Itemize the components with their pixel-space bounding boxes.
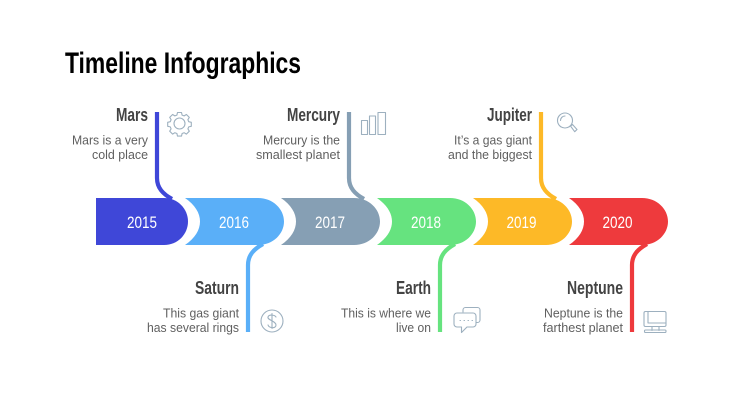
label: Mercury: Mercury is the [263,132,340,148]
label: Mars: cold place [92,147,148,162]
label: Mars: Mars is a very [72,132,148,148]
segment 2016 [185,198,284,332]
icon: bar chart [362,112,386,134]
segment 2017 [281,112,380,245]
icon: magnifier [558,113,577,132]
label: Neptune: Neptune [567,278,623,298]
label: Saturn [147,278,239,335]
icon: chat bubbles [454,308,480,332]
icon: monitor [644,312,666,332]
label: Mars [72,105,148,162]
segment 2015: 2015 [127,213,157,232]
label: Earth: Earth [396,278,431,298]
segment 2015 [96,112,188,245]
label: Earth: This is where we [341,306,431,320]
segment 2020 [569,198,668,332]
label: Neptune [543,278,623,335]
segment 2018 [377,198,476,332]
icon: gear [168,112,191,136]
segment 2020: 2020 [602,213,632,232]
label: Mars: Mars [116,105,148,125]
label: Saturn: Saturn [195,278,239,298]
segment 2017: 2017 [315,213,345,232]
label: Jupiter: Jupiter [487,105,532,125]
label: Earth: live on [396,320,431,335]
label: Saturn: This gas giant [163,306,239,320]
label: Earth [341,278,431,335]
segment 2019 [473,112,572,245]
label: Neptune: Neptune is the [544,306,623,320]
label: Saturn: has several rings [147,320,239,335]
label: Jupiter [448,105,532,162]
icon: dollar coin [261,310,283,332]
label: Mercury: smallest planet [256,147,340,162]
segment 2019: 2019 [506,213,536,232]
timeline band [96,112,668,332]
segment 2016: 2016 [219,213,249,232]
segment 2018: 2018 [411,213,441,232]
label: Jupiter: It’s a gas giant [454,132,532,148]
label: Jupiter: and the biggest [448,147,532,162]
label: Neptune: farthest planet [543,320,623,335]
title: Timeline Infographics [65,47,301,80]
label: Mercury: Mercury [287,105,340,125]
label: Mercury [256,105,340,162]
